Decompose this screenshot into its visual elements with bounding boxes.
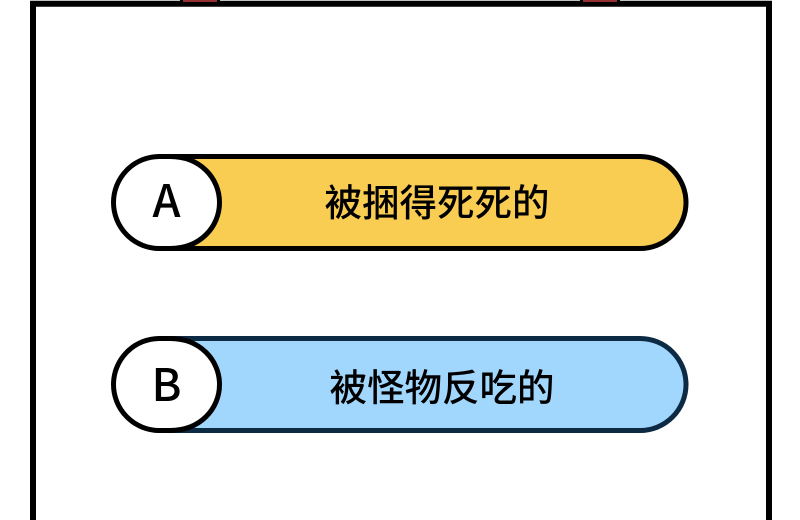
option B text: 被怪物反吃的 — [330, 357, 554, 412]
option A badge — [114, 156, 220, 248]
option B letter: B — [151, 349, 182, 414]
option B badge — [114, 338, 220, 430]
left top hanging tab — [180, 0, 220, 3]
option A text: 被捆得死死的 — [324, 172, 550, 227]
option A — [114, 156, 686, 248]
option B — [114, 338, 686, 430]
option A bar — [160, 156, 686, 248]
right top hanging tab — [580, 0, 620, 3]
option A letter: A — [152, 165, 180, 230]
option B bar — [160, 338, 686, 430]
